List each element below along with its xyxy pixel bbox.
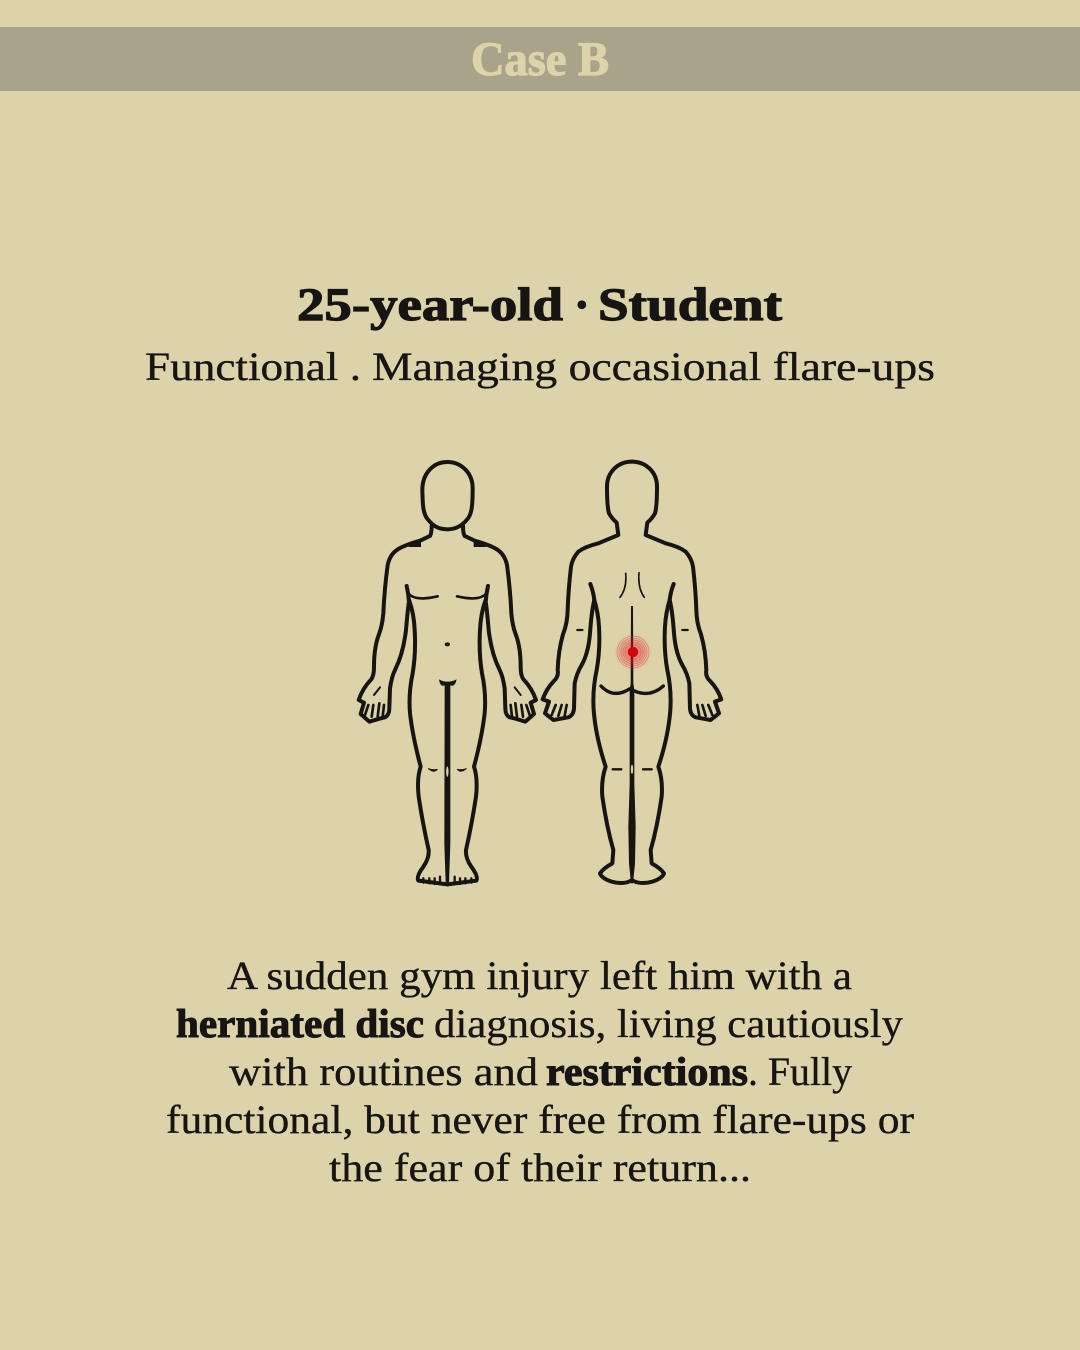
pain marker [614, 633, 652, 671]
description text [166, 953, 914, 1190]
heading [297, 279, 782, 331]
description text: restrictions [546, 1049, 748, 1094]
description text: the fear of their return... [329, 1145, 751, 1190]
body figure: back view [543, 462, 721, 883]
description text: diagnosis, living cautiously [434, 1001, 903, 1046]
heading: Student [598, 279, 782, 331]
header band [0, 27, 1080, 91]
body figure: front view [359, 462, 536, 884]
description text: A sudden gym injury left him with a [227, 953, 852, 998]
subheading: Managing occasional flare-ups [372, 344, 935, 389]
description text: herniated disc [176, 1001, 424, 1046]
heading: · [574, 279, 590, 331]
heading: 25-year-old [297, 279, 563, 331]
description text: with routines and [229, 1049, 538, 1094]
subheading: Functional . [145, 344, 361, 389]
band title: Case B [471, 33, 609, 86]
subheading [145, 344, 935, 389]
description text: . Fully [748, 1049, 852, 1094]
description text: functional, but never free from flare-ups or [166, 1097, 914, 1142]
